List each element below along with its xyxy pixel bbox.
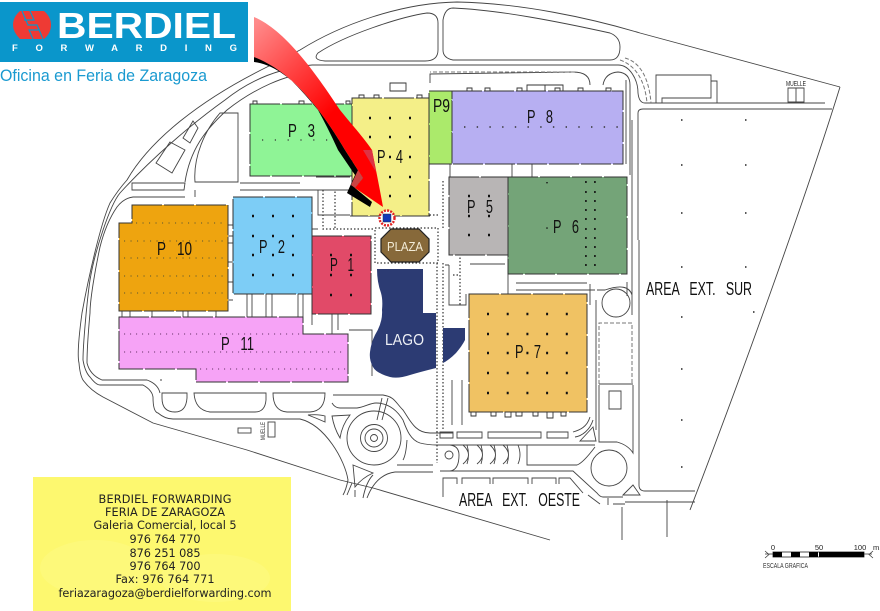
hall P9	[429, 91, 452, 164]
hall P11	[119, 317, 348, 382]
hall P2	[233, 197, 312, 294]
scale bar: 0	[771, 543, 775, 552]
lake	[370, 269, 465, 378]
contact box: 976 764 770	[130, 533, 200, 546]
hall labels	[157, 96, 579, 362]
label: area ext. oeste: AREA EXT. OESTE	[459, 490, 580, 510]
dotted walkways	[323, 180, 460, 463]
contact box: Fax: 976 764 771	[116, 573, 214, 586]
label: muelle south: MUELLE	[260, 422, 267, 440]
hall labels: P 11	[221, 334, 254, 354]
roundabout: east	[440, 289, 630, 486]
brand subtitle: FORWARDING	[12, 43, 237, 54]
scale bar: 100	[854, 543, 866, 552]
contact box: FERIA DE ZARAGOZA	[105, 506, 225, 519]
contact box: feriazaragoza@berdielforwarding.com	[58, 587, 272, 600]
scale bar: ESCALA GRAFICA	[763, 563, 808, 570]
loading docks on halls	[253, 83, 611, 418]
hall P10	[119, 205, 228, 311]
hall labels: P 4	[377, 147, 403, 167]
site plan road network	[78, 2, 840, 540]
brand name: BERDIEL	[57, 5, 236, 46]
hall labels: P 1	[330, 255, 354, 275]
office location marker	[380, 210, 394, 226]
label: area ext. sur: AREA EXT. SUR	[646, 279, 752, 299]
hall P8	[452, 91, 623, 164]
hall labels: P9	[433, 96, 450, 116]
plaza	[381, 229, 429, 262]
label: muelle north: MUELLE	[786, 81, 806, 88]
contact box: 976 764 700	[130, 560, 200, 573]
hall labels: P 6	[553, 217, 579, 237]
hall labels: P 2	[259, 237, 285, 257]
logo banner	[0, 2, 248, 62]
scale bar: 50	[815, 543, 823, 552]
hall P5	[449, 177, 508, 255]
logo mark	[13, 11, 51, 39]
hall labels: P 5	[467, 197, 493, 217]
contact box: Galeria Comercial, local 5	[94, 519, 236, 532]
hall P1	[312, 236, 371, 314]
label: area ext. sur	[646, 120, 754, 467]
hall P3	[250, 104, 352, 176]
hall P6	[508, 177, 627, 274]
contact box: 876 251 085	[130, 547, 200, 560]
hall labels: P 10	[157, 239, 192, 259]
contact box: BERDIEL FORWARDING	[98, 493, 232, 506]
heading: office subtitle: Oficina en Feria de Zaragoza	[0, 66, 208, 85]
hall P4	[352, 98, 429, 216]
roundabout: main entrance	[308, 398, 401, 498]
scale bar	[763, 543, 880, 570]
dashed parking area	[430, 58, 651, 384]
hall labels: P 3	[288, 121, 315, 141]
contact box	[33, 477, 291, 611]
hall labels: P 8	[527, 107, 553, 127]
location arrow	[254, 17, 383, 207]
plaza: PLAZA	[387, 239, 423, 254]
hall labels: P 7	[515, 342, 541, 362]
label: lago: LAGO	[385, 332, 424, 349]
hall P7	[469, 294, 587, 412]
